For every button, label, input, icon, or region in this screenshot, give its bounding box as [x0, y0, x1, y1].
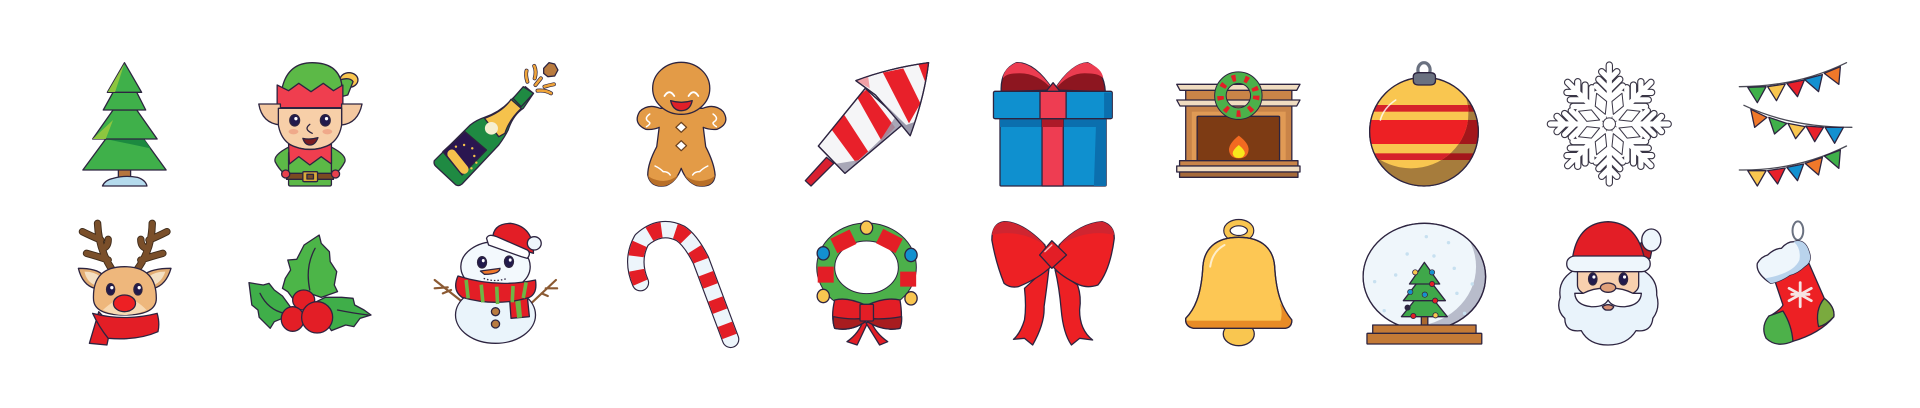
icon: christmas wreath [817, 221, 917, 345]
icon: bunting flags [1739, 63, 1852, 186]
icon: golden bell [1182, 223, 1296, 346]
icon: fireplace with wreath [1177, 78, 1300, 177]
icon: christmas bauble [1369, 61, 1479, 187]
icon: gift box [993, 63, 1112, 186]
icon: christmas tree [83, 63, 166, 186]
icon: candy cane [636, 230, 731, 339]
icon: champagne bottle [434, 63, 558, 186]
icon: snowflake [1550, 65, 1668, 183]
icon: elf [259, 63, 362, 186]
icon: gingerbread man [637, 62, 726, 186]
snow specks [1375, 237, 1472, 313]
wreath on mantel [1220, 78, 1256, 114]
globe tree [1401, 262, 1447, 326]
icon: reindeer [78, 223, 171, 345]
red wreath segments [826, 236, 908, 287]
icon: christmas stocking [1757, 221, 1834, 344]
icon: santa claus [1559, 222, 1661, 345]
icon: holly [249, 235, 371, 333]
icon: snow globe [1362, 222, 1486, 345]
stocking snowflake [1789, 283, 1811, 307]
icon: firework rocket [805, 63, 929, 186]
icon: red bow [992, 222, 1114, 345]
icon: snowman [435, 223, 557, 343]
flame [1229, 136, 1249, 158]
